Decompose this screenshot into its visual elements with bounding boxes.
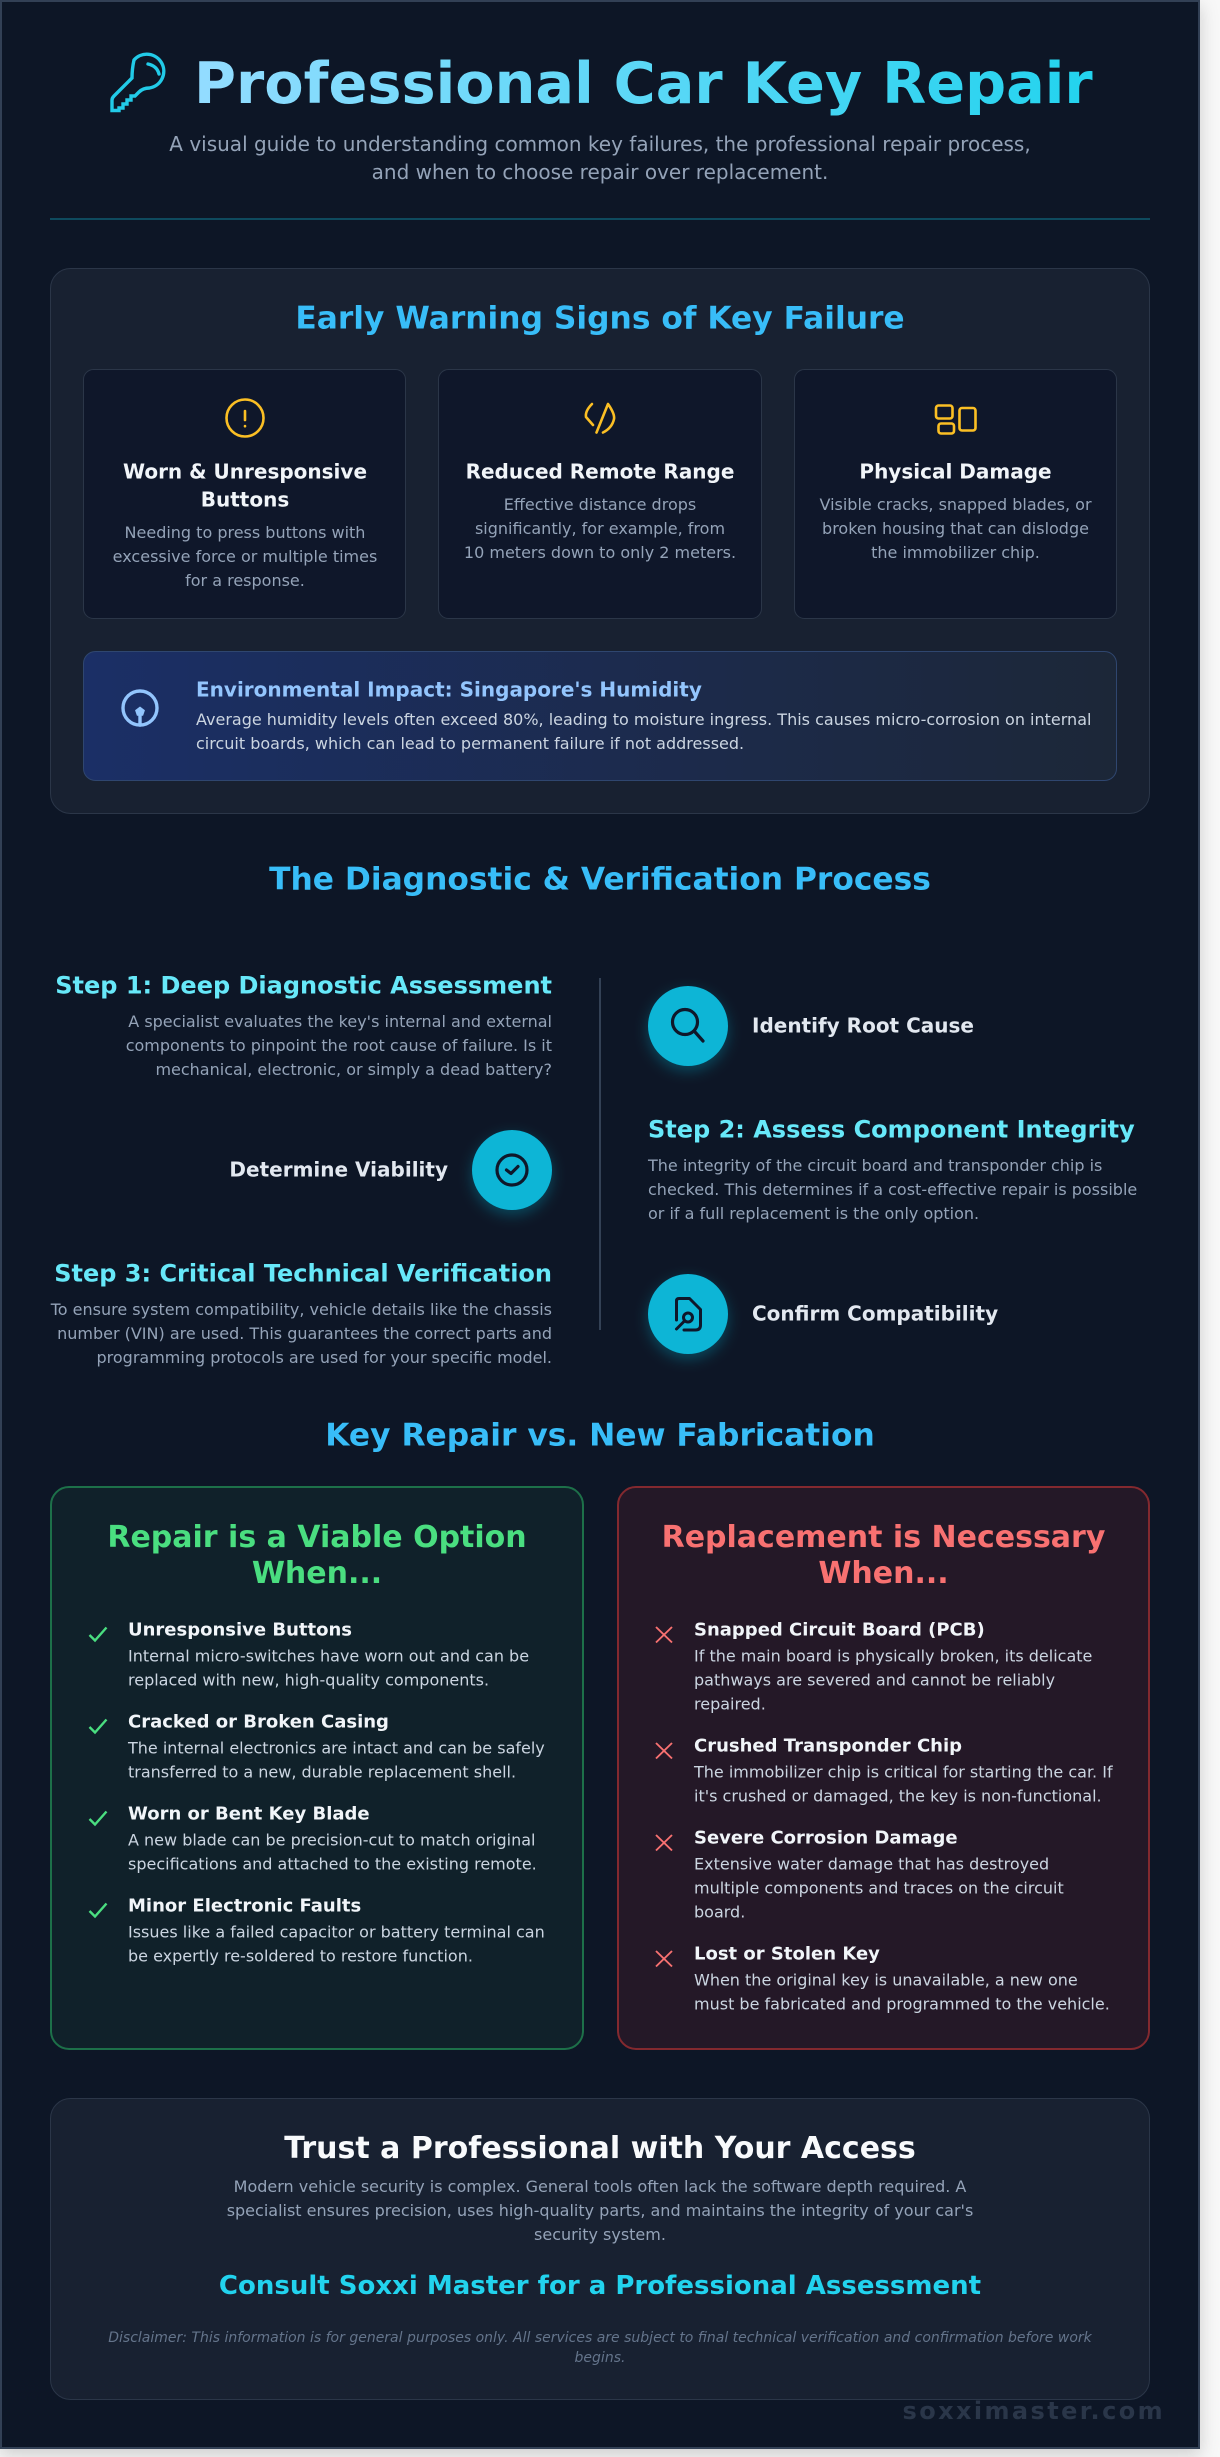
callout: humidity <box>84 652 1116 780</box>
card title: Reduced Remote Range <box>466 460 734 484</box>
step 2 text: or if a full replacement is the only option. <box>648 1204 979 1223</box>
icon: broken signal <box>586 404 614 432</box>
card title: Buttons <box>201 488 289 512</box>
item: snapped pcb: If the main board is physically broken, its delicate <box>694 1646 1092 1666</box>
card title <box>123 460 367 512</box>
card text: for a response. <box>185 571 305 590</box>
body text: specialist ensures precision, uses high-quality parts, and maintains the integrity of your car's <box>227 2201 973 2220</box>
card text <box>464 495 736 562</box>
heading: repair vs fabrication: Key Repair vs. New Fabrication <box>325 1418 875 1454</box>
icon: check circle <box>472 1130 552 1210</box>
label: identify root cause: Identify Root Cause <box>752 1014 974 1038</box>
subtitle: and when to choose repair over replacement. <box>372 160 828 184</box>
callout text <box>196 710 1091 753</box>
item: unresponsive buttons: replaced with new, high-quality components. <box>128 1670 489 1690</box>
item: snapped pcb: repaired. <box>694 1694 766 1714</box>
callout title: Environmental Impact: Singapore's Humidity <box>196 678 702 702</box>
item: minor faults: Issues like a failed capacitor or battery terminal can <box>128 1922 545 1942</box>
disclaimer <box>108 2330 1093 2366</box>
step 2 text <box>647 1116 1137 1223</box>
card title: Physical Damage <box>859 460 1052 484</box>
heading: diagnostic process: The Diagnostic & Verification Process <box>269 862 931 898</box>
panel heading: Replacement is Necessary <box>662 1520 1106 1555</box>
icon: fragments <box>936 406 976 434</box>
card text: Effective distance drops <box>504 495 696 514</box>
icon: droplet gauge <box>123 691 157 725</box>
item: lost key: Lost or Stolen Key <box>694 1944 880 1964</box>
item: unresponsive buttons: Unresponsive Buttons <box>128 1620 352 1640</box>
card text: excessive force or multiple times <box>113 547 377 566</box>
step 1 text: A specialist evaluates the key's internal and external <box>128 1012 552 1031</box>
item: lost key: When the original key is unavailable, a new one <box>694 1970 1078 1990</box>
watermark: soxximaster.com <box>903 2397 1165 2425</box>
card text: the immobilizer chip. <box>871 543 1040 562</box>
item: worn blade: specifications and attached to the existing remote. <box>128 1854 537 1874</box>
subtitle <box>169 132 1031 184</box>
card: reduced range <box>438 370 762 618</box>
item: crushed chip <box>656 1736 1113 1806</box>
item: unresponsive buttons: Internal micro-switches have worn out and can be <box>128 1646 529 1666</box>
card text: Visible cracks, snapped blades, or <box>819 495 1092 514</box>
step 1 text <box>55 972 552 1079</box>
label: confirm compatibility: Confirm Compatibility <box>752 1302 998 1326</box>
item: minor faults: Minor Electronic Faults <box>128 1896 361 1916</box>
step 3 text: number (VIN) are used. This guarantees the correct parts and <box>57 1324 552 1343</box>
disclaimer: Disclaimer: This information is for general purposes only. All services are subject to final technical verification and confirmation before work <box>108 2330 1093 2346</box>
item: crushed chip: The immobilizer chip is critical for starting the car. If <box>693 1762 1113 1782</box>
panel: replacement necessary <box>618 1487 1149 2049</box>
card: physical damage <box>794 370 1116 618</box>
panel heading: When... <box>818 1556 949 1591</box>
icon: magnifier <box>648 986 728 1066</box>
card: worn buttons <box>84 370 406 618</box>
item: worn blade: Worn or Bent Key Blade <box>128 1804 370 1824</box>
panel heading <box>662 1520 1106 1591</box>
panel heading: Repair is a Viable Option <box>107 1520 527 1555</box>
step 3 text <box>50 1260 552 1367</box>
item: crushed chip: it's crushed or damaged, the key is non-functional. <box>694 1786 1102 1806</box>
item: snapped pcb <box>656 1620 1092 1714</box>
card text <box>113 523 377 590</box>
card text: 10 meters down to only 2 meters. <box>464 543 736 562</box>
callout text: Average humidity levels often exceed 80%, leading to moisture ingress. This causes micro-corrosion on internal <box>196 710 1091 729</box>
card text: Needing to press buttons with <box>125 523 365 542</box>
body text <box>227 2177 973 2244</box>
subtitle: A visual guide to understanding common key failures, the professional repair process, <box>169 132 1031 156</box>
panel: early warning signs <box>50 268 1150 814</box>
item: minor faults: be expertly re-soldered to restore function. <box>128 1946 473 1966</box>
panel: trust a professional <box>50 2098 1150 2400</box>
item: snapped pcb: pathways are severed and cannot be reliably <box>694 1670 1055 1690</box>
item: crushed chip: Crushed Transponder Chip <box>694 1736 962 1756</box>
item: corrosion: board. <box>694 1902 745 1922</box>
item: worn blade: A new blade can be precision-cut to match original <box>128 1830 535 1850</box>
step 2 text: The integrity of the circuit board and transponder chip is <box>647 1156 1102 1175</box>
heading: Trust a Professional with Your Access <box>284 2131 916 2166</box>
icon: key <box>112 54 164 110</box>
header <box>112 50 1093 184</box>
panel: repair viable <box>51 1487 583 2049</box>
disclaimer: begins. <box>575 2350 625 2366</box>
call to action: Consult Soxxi Master for a Professional Assessment <box>219 2271 981 2301</box>
step 3 text: To ensure system compatibility, vehicle details like the chassis <box>50 1300 552 1319</box>
body text: security system. <box>534 2225 666 2244</box>
item: corrosion: Severe Corrosion Damage <box>694 1828 958 1848</box>
step 2 text: Step 2: Assess Component Integrity <box>648 1116 1135 1144</box>
panel heading: When... <box>252 1556 382 1591</box>
icon: alert circle <box>226 400 264 436</box>
card text: broken housing that can dislodge <box>822 519 1089 538</box>
item: cracked casing <box>90 1712 545 1782</box>
item: minor faults <box>90 1896 545 1966</box>
item: snapped pcb: Snapped Circuit Board (PCB) <box>694 1620 985 1640</box>
item: unresponsive buttons <box>90 1620 529 1690</box>
item: lost key: must be fabricated and programmed to the vehicle. <box>694 1994 1110 2014</box>
card text: significantly, for example, from <box>475 519 725 538</box>
step 2 text: checked. This determines if a cost-effective repair is possible <box>648 1180 1137 1199</box>
item: corrosion: Extensive water damage that has destroyed <box>694 1854 1049 1874</box>
item: lost key <box>656 1944 1110 2014</box>
card title: Worn & Unresponsive <box>123 460 367 484</box>
heading: early warning signs: Early Warning Signs of Key Failure <box>295 300 905 336</box>
item: corrosion: multiple components and traces on the circuit <box>694 1878 1064 1898</box>
icon: document search <box>648 1274 728 1354</box>
timeline <box>50 972 1137 1367</box>
card text <box>819 495 1092 562</box>
step 1 text: Step 1: Deep Diagnostic Assessment <box>55 972 552 1000</box>
item: cracked casing: transferred to a new, durable replacement shell. <box>128 1762 516 1782</box>
title: Professional Car Key Repair <box>194 50 1093 117</box>
callout text: circuit boards, which can lead to permanent failure if not addressed. <box>196 734 744 753</box>
step 1 text: mechanical, electronic, or simply a dead battery? <box>155 1060 552 1079</box>
panel heading <box>107 1520 527 1591</box>
item: cracked casing: Cracked or Broken Casing <box>128 1712 389 1732</box>
item: worn blade <box>90 1804 537 1874</box>
step 3 text: programming protocols are used for your specific model. <box>96 1348 552 1367</box>
step 3 text: Step 3: Critical Technical Verification <box>54 1260 552 1288</box>
body text: Modern vehicle security is complex. General tools often lack the software depth required. A <box>234 2177 966 2196</box>
label: determine viability: Determine Viability <box>229 1158 448 1182</box>
item: corrosion <box>656 1828 1064 1922</box>
item: cracked casing: The internal electronics are intact and can be safely <box>127 1738 545 1758</box>
step 1 text: components to pinpoint the root cause of failure. Is it <box>126 1036 552 1055</box>
